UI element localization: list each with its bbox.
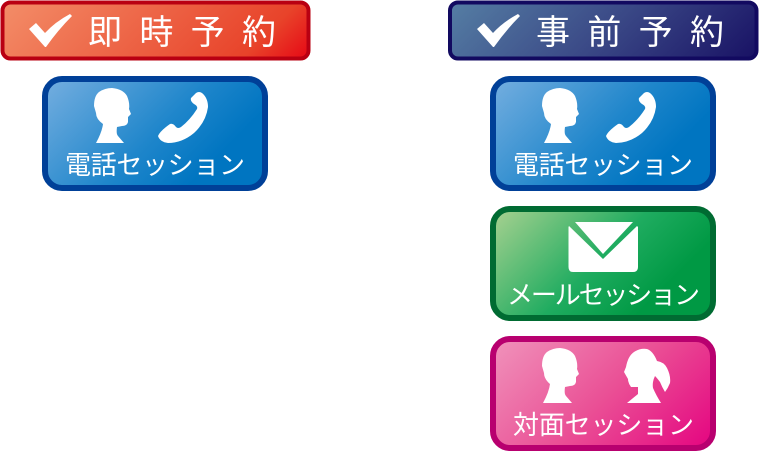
panel: phone session right	[493, 79, 713, 188]
icon: woman silhouette	[542, 348, 579, 403]
card background	[493, 79, 713, 188]
card background	[493, 209, 713, 318]
header plate navy	[450, 2, 756, 58]
panel: immediate booking header	[2, 2, 308, 58]
icon: telephone	[606, 92, 656, 143]
card background	[45, 79, 265, 188]
panel: mail session	[493, 209, 713, 318]
panel: face-to-face session	[493, 339, 713, 448]
icon: check mark	[29, 14, 72, 47]
label: mail session: メールセッション	[507, 280, 700, 310]
header plate red	[2, 2, 308, 58]
heading: immediate booking: 即時予約	[88, 14, 276, 52]
panel: advance booking header	[450, 2, 756, 58]
label: face-to-face session: 対面セッション	[513, 410, 694, 440]
icon: envelope	[568, 222, 638, 272]
icon: check mark	[477, 14, 520, 47]
label: phone session: 電話セッション	[65, 150, 245, 180]
icon: woman silhouette	[542, 88, 579, 143]
label: phone session: 電話セッション	[513, 150, 693, 180]
card background	[493, 339, 713, 448]
heading: advance booking: 事前予約	[536, 14, 724, 52]
icon: woman silhouette	[94, 88, 131, 143]
panel: phone session left	[45, 79, 265, 188]
icon: telephone	[158, 92, 208, 143]
icon: woman with ponytail silhouette	[624, 349, 670, 403]
